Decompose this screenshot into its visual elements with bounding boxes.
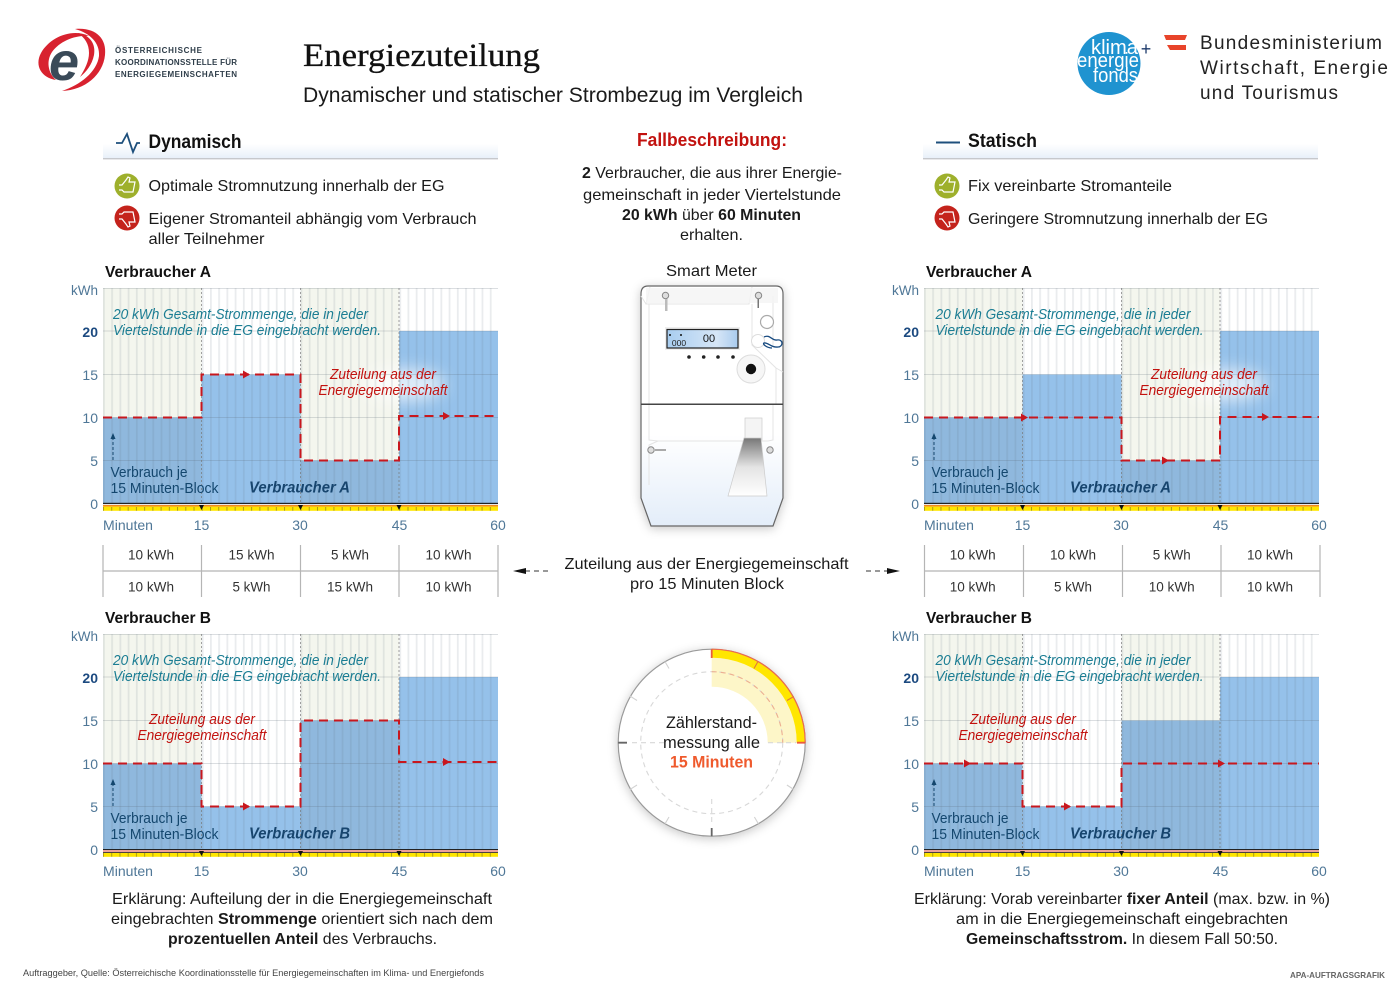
panel: Dynamisch pro and contra — [114, 174, 476, 248]
chart: Statisch Verbraucher A: 30 — [1113, 517, 1129, 533]
chart: Statisch Verbraucher B: 20 — [903, 670, 919, 686]
panel: Statisch header: Statisch — [968, 131, 1037, 152]
chart: Statisch Verbraucher B: 30 — [1113, 863, 1129, 879]
panel: Statisch pro and contra: Fix vereinbarte Stromanteile — [968, 178, 1172, 195]
chart: Dynamisch Verbraucher B: 10 — [82, 756, 98, 772]
chart: Statisch Verbraucher B: 10 — [903, 756, 919, 772]
chart: Dynamisch Verbraucher A: 20 — [82, 324, 98, 340]
chart: Statisch Verbraucher B: Zuteilung aus der — [969, 712, 1077, 728]
gauge: Zählerstandmessung: messung alle — [663, 734, 760, 752]
chart: Statisch Verbraucher A: Verbraucher A — [926, 264, 1032, 281]
text block: Erklärung Dynamisch: Erklärung: Aufteilung der in die Energiegemeinschaft — [112, 891, 493, 908]
table: Dynamisch Zuteilung: 10 kWh — [128, 578, 174, 594]
text block: Zuteilung pro Block: pro 15 Minuten Block — [630, 576, 785, 593]
table: Dynamisch Zuteilung: 10 kWh — [128, 546, 174, 562]
logo: Klima- und Energiefonds: fonds — [1093, 65, 1138, 87]
chart: Statisch Verbraucher B: 15 Minuten-Block — [932, 827, 1040, 843]
chart: Dynamisch Verbraucher B: Verbraucher B — [249, 826, 350, 842]
chart: Dynamisch Verbraucher A: 10 — [82, 410, 98, 426]
logo: Koordinationsstelle: ÖSTERREICHISCHE — [115, 46, 203, 55]
chart: Dynamisch Verbraucher B: Viertelstunde in die EG eingebracht werden. — [113, 669, 381, 685]
logo: Koordinationsstelle: KOORDINATIONSSTELLE FÜR — [115, 58, 237, 67]
chart: Statisch Verbraucher B: 0 — [911, 842, 919, 858]
chart: Dynamisch Verbraucher B: Verbrauch je — [110, 811, 188, 827]
chart: Dynamisch Verbraucher B — [71, 610, 506, 879]
text block: Erklärung Dynamisch: prozentuellen Anteil des Verbrauchs. — [168, 931, 437, 948]
text block: Fallbeschreibung: 2 Verbraucher, die aus ihrer Energie- — [582, 165, 842, 182]
subtitle: Dynamischer und statischer Strombezug im Vergleich — [303, 84, 803, 107]
panel: Dynamisch header — [103, 132, 498, 159]
table: Dynamisch Zuteilung: 15 kWh — [228, 546, 274, 562]
chart: Statisch Verbraucher B: Minuten — [924, 863, 974, 879]
text block: Zuteilung pro Block: Zuteilung aus der Energiegemeinschaft — [564, 556, 849, 573]
chart: Dynamisch Verbraucher A: Energiegemeinschaft — [318, 383, 448, 399]
text block: Erklärung Dynamisch — [111, 891, 493, 948]
chart: Statisch Verbraucher A: Verbrauch je — [932, 465, 1008, 481]
chart: Statisch Verbraucher A: 15 — [1015, 517, 1030, 533]
chart: Dynamisch Verbraucher A: 15 — [82, 367, 98, 383]
chart: Statisch Verbraucher B: Viertelstunde in die EG eingebracht werden. — [936, 669, 1204, 685]
chart: Statisch Verbraucher A: kWh — [892, 282, 919, 298]
chart: Dynamisch Verbraucher B: 60 — [490, 863, 506, 879]
text block: Erklärung Dynamisch: eingebrachten Strommenge orientiert sich nach dem — [111, 911, 493, 928]
chart: Statisch Verbraucher A: 15 Minuten-Block — [932, 481, 1040, 497]
logo: Bundesministerium: und Tourismus — [1200, 83, 1338, 104]
chart: Statisch Verbraucher B: Verbraucher B — [926, 610, 1032, 627]
panel: Dynamisch pro and contra: Eigener Stromanteil abhängig vom Verbrauch — [148, 211, 476, 228]
text block: Erklärung Statisch — [914, 891, 1330, 948]
source note: Auftraggeber, Quelle: Österreichische Koordinationsstelle für Energiegemeinschaften im Klima- und Energiefonds — [23, 968, 485, 978]
panel: Statisch pro and contra — [934, 174, 1268, 230]
chart: Dynamisch Verbraucher B: 15 — [82, 713, 98, 729]
chart: Statisch Verbraucher B: kWh — [892, 628, 919, 644]
chart: Dynamisch Verbraucher A: 5 — [90, 453, 98, 469]
chart: Dynamisch Verbraucher A: Verbraucher A — [105, 264, 211, 281]
icon: smart meter: 000 — [672, 338, 686, 348]
table: Dynamisch Zuteilung — [103, 545, 498, 597]
text block: Fallbeschreibung: erhalten. — [680, 227, 743, 244]
logo: Bundesministerium: Wirtschaft, Energie — [1200, 58, 1388, 79]
logo: Klima- und Energiefonds: klima — [1091, 37, 1139, 59]
table: Statisch Zuteilung: 10 kWh — [1050, 546, 1096, 562]
chart: Dynamisch Verbraucher B: 30 — [292, 863, 308, 879]
chart: Statisch Verbraucher B: Verbrauch je — [932, 811, 1008, 827]
table: Statisch Zuteilung: 10 kWh — [1149, 578, 1195, 594]
chart: Statisch Verbraucher B: Energiegemeinschaft — [958, 728, 1088, 744]
gauge: Zählerstandmessung: 15 Minuten — [670, 754, 753, 772]
chart: Statisch Verbraucher A: 15 — [903, 367, 919, 383]
chart: Statisch Verbraucher A: 0 — [911, 496, 919, 512]
chart: Statisch Verbraucher A: Verbraucher A — [1070, 480, 1171, 496]
logo: Klima- und Energiefonds: + — [1141, 39, 1151, 59]
text block: Fallbeschreibung — [582, 165, 842, 244]
table: Statisch Zuteilung — [924, 545, 1320, 597]
chart: Dynamisch Verbraucher B: 20 kWh Gesamt-Strommenge, die in jeder — [112, 653, 369, 669]
chart: Dynamisch Verbraucher B: 0 — [90, 842, 98, 858]
panel: Dynamisch pro and contra: Optimale Stromnutzung innerhalb der EG — [148, 178, 444, 195]
chart: Dynamisch Verbraucher A: Zuteilung aus der — [329, 367, 437, 383]
title: Energiezuteilung — [303, 38, 540, 74]
chart: Dynamisch Verbraucher A: 45 — [392, 517, 407, 533]
text block: Fallbeschreibung: gemeinschaft in jeder Viertelstunde — [583, 187, 841, 204]
text block: Zuteilung pro Block — [564, 556, 849, 593]
chart: Dynamisch Verbraucher A: 20 kWh Gesamt-Strommenge, die in jeder — [112, 307, 369, 323]
chart: Dynamisch Verbraucher B: Verbraucher B — [105, 610, 211, 627]
chart: Dynamisch Verbraucher B: Minuten — [103, 863, 153, 879]
chart: Statisch Verbraucher A: 10 — [903, 410, 919, 426]
table: Statisch Zuteilung: 10 kWh — [1247, 546, 1293, 562]
chart: Statisch Verbraucher B: 45 — [1213, 863, 1228, 879]
chart: Dynamisch Verbraucher B: 15 Minuten-Block — [110, 827, 219, 843]
logo: Koordinationsstelle — [38, 29, 237, 92]
chart: Dynamisch Verbraucher B: 5 — [90, 799, 98, 815]
chart: Statisch Verbraucher A: Viertelstunde in die EG eingebracht werden. — [936, 323, 1204, 339]
chart: Dynamisch Verbraucher A: Minuten — [103, 517, 153, 533]
chart: Statisch Verbraucher B: 5 — [911, 799, 919, 815]
text block: Fallbeschreibung: 20 kWh über 60 Minuten — [622, 207, 801, 224]
chart: Dynamisch Verbraucher B: Zuteilung aus der — [148, 712, 256, 728]
logo: Koordinationsstelle: ENERGIEGEMEINSCHAFTEN — [115, 70, 237, 79]
chart: Dynamisch Verbraucher A: Verbraucher A — [249, 480, 350, 496]
table: Statisch Zuteilung: 5 kWh — [1054, 578, 1092, 594]
chart: Statisch Verbraucher A: Energiegemeinschaft — [1140, 383, 1269, 399]
chart: Dynamisch Verbraucher B: 45 — [392, 863, 407, 879]
chart: Statisch Verbraucher B: 20 kWh Gesamt-Strommenge, die in jeder — [935, 653, 1192, 669]
chart: Dynamisch Verbraucher B: 15 — [194, 863, 209, 879]
arrow: left to Dynamisch table — [513, 568, 548, 574]
chart: Statisch Verbraucher A: 45 — [1213, 517, 1228, 533]
credit: APA-AUFTRAGSGRAFIK — [1290, 970, 1386, 980]
logo: Koordinationsstelle: e — [49, 32, 79, 92]
chart: Dynamisch Verbraucher A: Verbrauch je — [110, 465, 188, 481]
panel: Dynamisch pro and contra: aller Teilnehmer — [148, 231, 265, 248]
label: Smart Meter: Smart Meter — [666, 263, 758, 280]
chart: Statisch Verbraucher B: 15 — [1015, 863, 1030, 879]
chart: Statisch Verbraucher B: 15 — [903, 713, 919, 729]
chart: Dynamisch Verbraucher A: Viertelstunde in die EG eingebracht werden. — [113, 323, 381, 339]
text block: Erklärung Statisch: Erklärung: Vorab vereinbarter fixer Anteil (max. bzw. in %) — [914, 891, 1330, 908]
logo: Klima- und Energiefonds — [1077, 32, 1151, 95]
chart: Statisch Verbraucher A — [892, 264, 1327, 533]
panel: Dynamisch header: Dynamisch — [148, 132, 242, 153]
table: Dynamisch Zuteilung: 5 kWh — [331, 546, 369, 562]
chart: Statisch Verbraucher B — [892, 610, 1327, 879]
panel: Statisch pro and contra: Geringere Stromnutzung innerhalb der EG — [968, 211, 1268, 228]
arrow: right to Statisch table — [866, 568, 900, 574]
chart: Statisch Verbraucher A: Minuten — [924, 517, 974, 533]
chart: Statisch Verbraucher A: 20 kWh Gesamt-Strommenge, die in jeder — [935, 307, 1192, 323]
table: Statisch Zuteilung: 10 kWh — [1247, 578, 1293, 594]
logo: Bundesministerium: Bundesministerium — [1200, 33, 1382, 54]
heading: Fallbeschreibung: Fallbeschreibung: — [637, 129, 787, 150]
icon: smart meter: 00 — [703, 333, 715, 345]
chart: Statisch Verbraucher B: 60 — [1311, 863, 1327, 879]
chart: Dynamisch Verbraucher A: 30 — [292, 517, 308, 533]
table: Dynamisch Zuteilung: 10 kWh — [426, 578, 472, 594]
chart: Dynamisch Verbraucher A: 60 — [490, 517, 506, 533]
chart: Dynamisch Verbraucher A — [71, 264, 506, 533]
chart: Statisch Verbraucher A: Zuteilung aus der — [1150, 367, 1258, 383]
table: Dynamisch Zuteilung: 10 kWh — [426, 546, 472, 562]
chart: Dynamisch Verbraucher A: 15 — [194, 517, 209, 533]
chart: Dynamisch Verbraucher B: 20 — [82, 670, 98, 686]
table: Statisch Zuteilung: 10 kWh — [950, 546, 996, 562]
gauge: Zählerstandmessung — [618, 649, 805, 836]
chart: Dynamisch Verbraucher A: 15 Minuten-Block — [110, 481, 219, 497]
table: Statisch Zuteilung: 5 kWh — [1153, 546, 1191, 562]
table: Dynamisch Zuteilung: 5 kWh — [232, 578, 270, 594]
logo: Klima- und Energiefonds: energie — [1077, 50, 1139, 72]
gauge: Zählerstandmessung: Zählerstand- — [666, 714, 757, 732]
table: Dynamisch Zuteilung: 15 kWh — [327, 578, 373, 594]
icon: smart meter — [641, 286, 783, 526]
chart: Dynamisch Verbraucher B: kWh — [71, 628, 98, 644]
chart: Statisch Verbraucher B: Verbraucher B — [1070, 826, 1171, 842]
chart: Dynamisch Verbraucher B: Energiegemeinschaft — [138, 728, 267, 744]
table: Statisch Zuteilung: 10 kWh — [950, 578, 996, 594]
chart: Statisch Verbraucher A: 20 — [903, 324, 919, 340]
chart: Statisch Verbraucher A: 60 — [1311, 517, 1327, 533]
chart: Dynamisch Verbraucher A: kWh — [71, 282, 98, 298]
text block: Erklärung Statisch: am in die Energiegemeinschaft eingebrachten — [956, 911, 1288, 928]
chart: Dynamisch Verbraucher A: 0 — [90, 496, 98, 512]
panel: Statisch header — [923, 131, 1318, 159]
text block: Erklärung Statisch: Gemeinschaftsstrom. In diesem Fall 50:50. — [966, 931, 1278, 948]
chart: Statisch Verbraucher A: 5 — [911, 453, 919, 469]
logo: Bundesministerium — [1164, 33, 1388, 104]
